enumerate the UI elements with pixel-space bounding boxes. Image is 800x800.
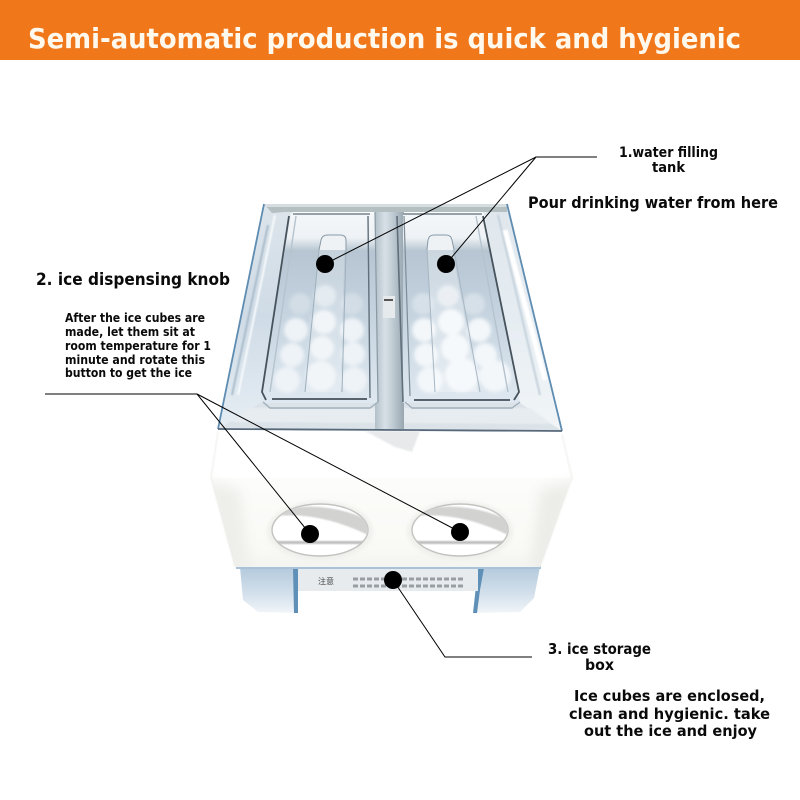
title: Semi-automatic production is quick and hygienic bbox=[28, 22, 741, 55]
ice storage box bbox=[236, 566, 541, 613]
left fill tray bbox=[260, 212, 378, 408]
callout 2: ice dispensing knob: minute and rotate this bbox=[65, 353, 205, 367]
callout 3: ice storage box bbox=[548, 640, 770, 740]
callout 1: water filling tank: 1.water filling bbox=[619, 145, 718, 161]
callout 2: ice dispensing knob: button to get the ice bbox=[65, 366, 192, 380]
callout 3: ice storage box: out the ice and enjoy bbox=[584, 722, 757, 740]
water tank top tray bbox=[218, 204, 562, 431]
left wall bbox=[218, 204, 293, 429]
storage box notice label bbox=[318, 576, 464, 586]
right fill tray bbox=[397, 213, 520, 408]
product: ice maker bbox=[205, 204, 578, 613]
callout 1: water filling tank bbox=[528, 145, 778, 212]
leader lines bbox=[45, 157, 597, 657]
right dispensing knob bbox=[408, 502, 511, 557]
callout 2: ice dispensing knob: After the ice cubes are bbox=[65, 311, 205, 325]
top flange bbox=[264, 204, 507, 213]
centre column bbox=[375, 205, 404, 429]
callout 2: ice dispensing knob: 2. ice dispensing knob bbox=[36, 270, 230, 290]
callout 1: water filling tank: tank bbox=[652, 160, 686, 176]
callout 3: ice storage box: box bbox=[585, 656, 614, 674]
marker dots bbox=[301, 255, 469, 589]
callout 3: ice storage box: clean and hygienic. take bbox=[569, 705, 770, 723]
outer edges bbox=[218, 204, 264, 429]
callout 1: water filling tank: Pour drinking water from here bbox=[528, 193, 778, 212]
front lip of tank bbox=[218, 403, 562, 431]
packing tape reflection bbox=[365, 431, 420, 452]
callout 2: ice dispensing knob: made, let them sit at bbox=[65, 325, 195, 339]
callout 3: ice storage box: 3. ice storage bbox=[548, 640, 651, 658]
callout 2: ice dispensing knob: room temperature for 1 bbox=[65, 339, 211, 353]
callout 2: ice dispensing knob bbox=[36, 270, 230, 380]
right wall bbox=[483, 204, 562, 431]
orange header banner bbox=[0, 0, 800, 60]
storage box notice label: 注意 bbox=[318, 576, 334, 586]
white front body bbox=[205, 430, 578, 570]
left dispensing knob bbox=[268, 502, 371, 557]
callout 3: ice storage box: Ice cubes are enclosed, bbox=[574, 687, 765, 705]
